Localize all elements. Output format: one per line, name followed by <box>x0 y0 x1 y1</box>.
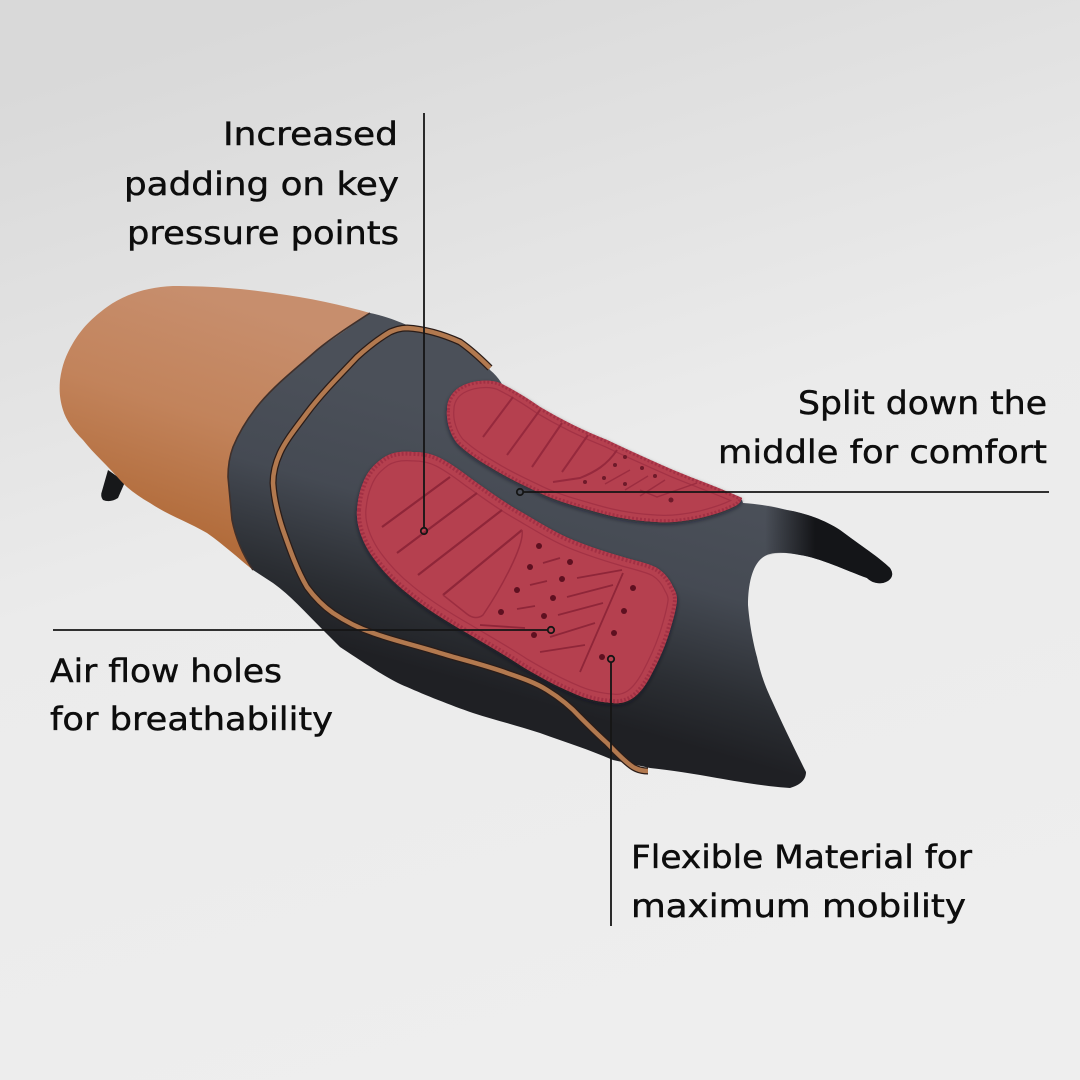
callout: split <box>517 384 1049 495</box>
tan rear section <box>60 286 370 570</box>
callout: split: middle for comfort <box>718 433 1047 471</box>
air flow holes <box>498 543 636 660</box>
callout: air flow: Air flow holes <box>50 652 282 690</box>
callout: padding <box>124 113 427 534</box>
seat illustration <box>60 286 892 788</box>
rear red pad <box>447 381 742 522</box>
callout: split: Split down the <box>798 384 1047 422</box>
callout: flexible <box>608 656 973 926</box>
dark tail end <box>755 505 892 583</box>
callout: air flow: for breathability <box>50 700 333 738</box>
seat leg <box>101 470 125 501</box>
callout: air flow <box>50 627 554 738</box>
tan piping <box>273 328 648 771</box>
callout: padding: Increased <box>223 115 398 153</box>
callout: padding: padding on key <box>124 165 399 203</box>
callout: flexible: maximum mobility <box>631 887 966 925</box>
seam between tan and dark <box>228 313 370 570</box>
callout: flexible: Flexible Material for <box>631 838 973 876</box>
callout: padding: pressure points <box>127 214 399 252</box>
front red pad <box>357 452 677 703</box>
dark seat body <box>228 313 892 788</box>
